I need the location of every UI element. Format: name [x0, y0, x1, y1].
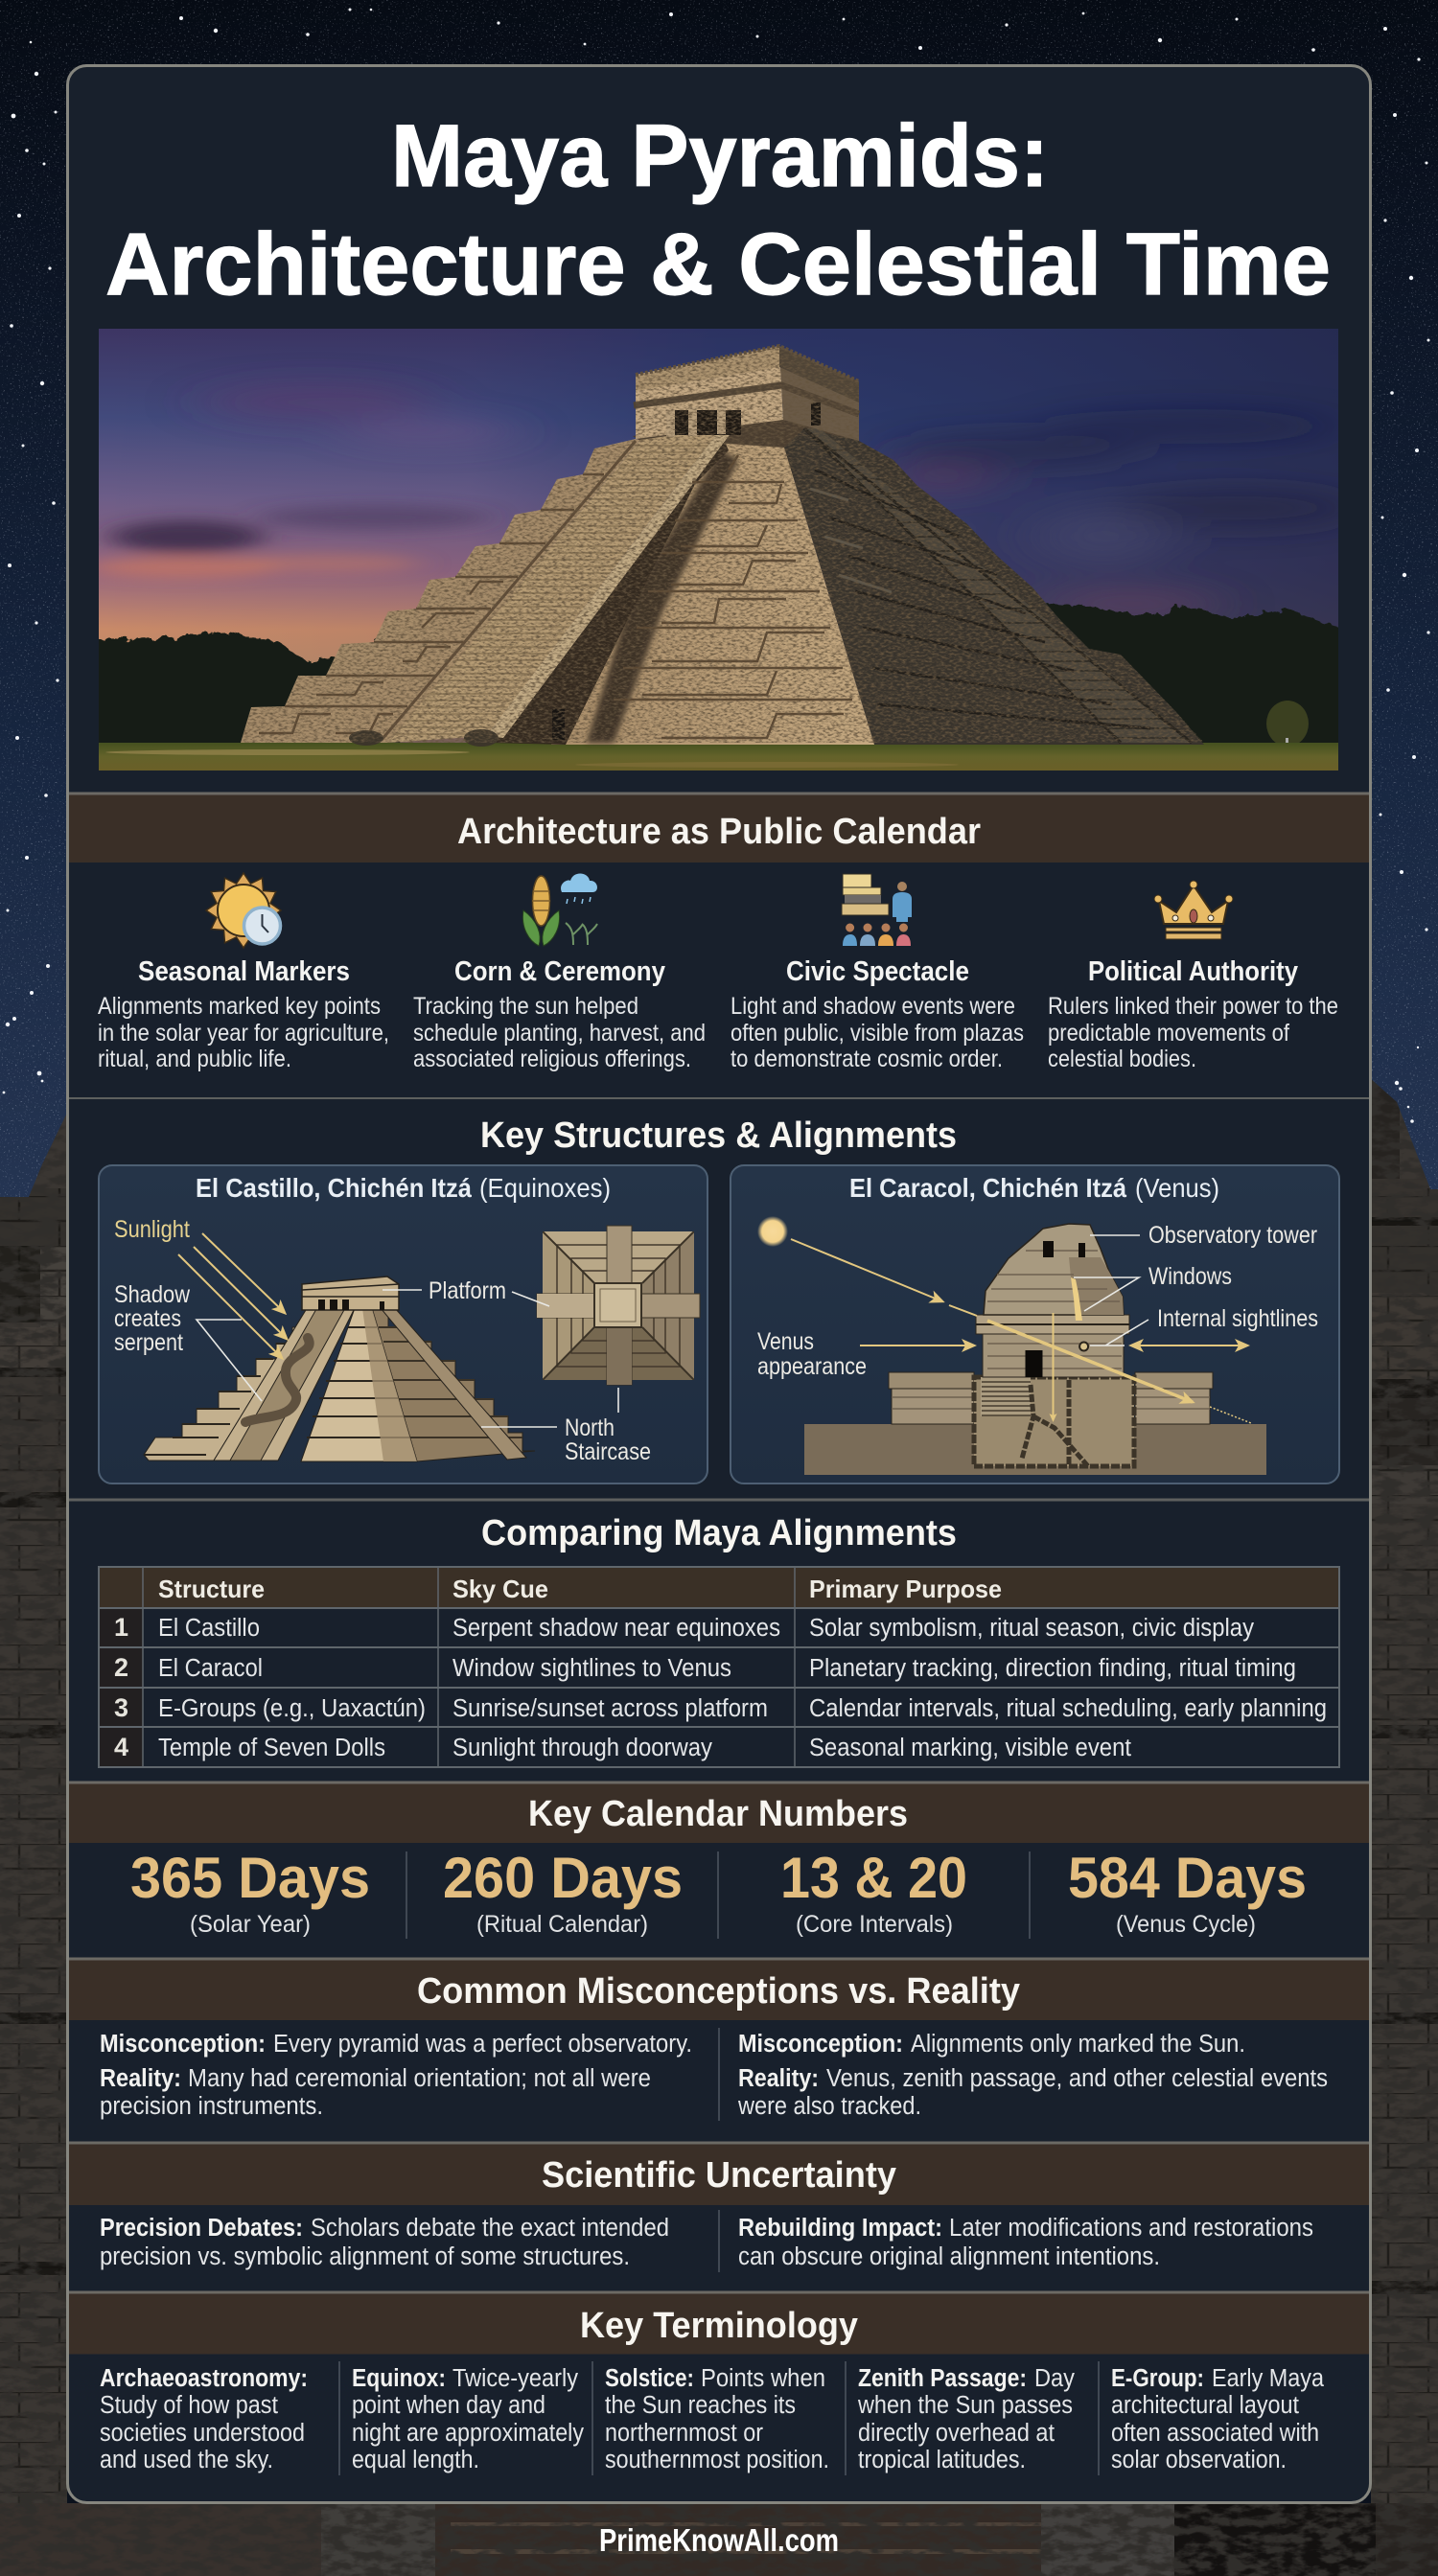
heading: Key Structures & Alignments	[480, 1116, 957, 1156]
table header: Sky Cue	[452, 1575, 548, 1603]
panel: El Castillo diagram	[99, 1165, 707, 1484]
Venus	[757, 1216, 788, 1247]
column: right misconception: Alignments only marked the Sun.	[911, 2031, 1245, 2058]
label: Venus appearance	[757, 1328, 867, 1380]
background: starry sky	[0, 0, 1438, 1246]
hero: temple	[636, 346, 783, 439]
callout lines	[197, 1290, 618, 1427]
column: Rebuilding Impact: Rebuilding Impact:	[738, 2215, 942, 2242]
term: Equinox: point when day and	[352, 2392, 545, 2419]
column: Precision Debates	[100, 2215, 669, 2270]
section: Scientific Uncertainty	[69, 2143, 1369, 2272]
table header	[158, 1575, 1002, 1603]
card: Corn & Ceremony	[413, 956, 706, 1072]
icon: corn and rain	[522, 873, 597, 946]
term: E-Group: architectural layout	[1111, 2392, 1299, 2419]
stat: 13 & 20	[780, 1846, 967, 1938]
hero: stair tread lines	[393, 445, 708, 735]
term: Zenith Passage: Day	[1034, 2365, 1075, 2392]
card: Political Authority: Rulers linked their power to the	[1048, 993, 1338, 1020]
term: Solstice: Points when	[701, 2365, 825, 2392]
term: Archaeoastronomy: and used the sky.	[100, 2447, 273, 2473]
column: Rebuilding Impact: can obscure original alignment intentions.	[738, 2243, 1160, 2270]
heading: Key Terminology	[580, 2306, 858, 2346]
card: Civic Spectacle: to demonstrate cosmic order.	[731, 1046, 1003, 1072]
hero: pyramid	[241, 346, 1204, 747]
label: Venus appearance: Venus	[757, 1328, 814, 1355]
icon: crown	[1154, 881, 1233, 939]
card: Corn & Ceremony: schedule planting, harvest, and	[413, 1020, 706, 1046]
row 3	[114, 1693, 1327, 1722]
term: Solstice: southernmost position.	[605, 2447, 829, 2473]
row 4	[114, 1733, 1131, 1761]
panel title: (Venus)	[1135, 1173, 1219, 1203]
Venus sightline arrows	[791, 1239, 1251, 1423]
row 4: 4	[114, 1733, 128, 1761]
term: E-Group: E-Group:	[1111, 2365, 1204, 2392]
label: Venus appearance: appearance	[757, 1353, 867, 1380]
row 2: El Caracol	[158, 1655, 263, 1682]
label: Sunlight: Sunlight	[114, 1216, 190, 1243]
stat: 365 Days: 365 Days	[130, 1846, 370, 1910]
term: E-Group: solar observation.	[1111, 2447, 1287, 2473]
table header: Primary Purpose	[809, 1575, 1002, 1603]
heading: Scientific Uncertainty	[542, 2155, 896, 2196]
row 4: Seasonal marking, visible event	[809, 1735, 1131, 1761]
term: E-Group: often associated with	[1111, 2420, 1319, 2447]
term: Archaeoastronomy: Archaeoastronomy:	[100, 2365, 308, 2392]
card: Seasonal Markers: Seasonal Markers	[138, 956, 350, 987]
row 1: El Castillo	[158, 1615, 260, 1642]
card: Civic Spectacle: Civic Spectacle	[786, 956, 969, 987]
card: Civic Spectacle: Light and shadow events were	[731, 993, 1015, 1020]
stat: 365 Days: (Solar Year)	[190, 1911, 311, 1938]
row 2: Window sightlines to Venus	[452, 1655, 731, 1682]
column: right misconception: Misconception:	[738, 2031, 903, 2058]
column: Rebuilding Impact: Later modifications and restorations	[949, 2215, 1313, 2242]
card: Seasonal Markers: Alignments marked key points	[98, 993, 381, 1020]
heading: Common Misconceptions vs. Reality	[417, 1971, 1020, 2012]
term: Zenith Passage: tropical latitudes.	[858, 2447, 1026, 2473]
section: Architecture as Public Calendar	[69, 794, 1369, 1072]
term: Archaeoastronomy: societies understood	[100, 2420, 305, 2447]
stat: 584 Days: 584 Days	[1068, 1846, 1307, 1910]
column: Precision Debates: Precision Debates:	[100, 2215, 303, 2242]
term: Equinox: night are approximately	[352, 2420, 584, 2447]
section header bar	[69, 1959, 1369, 2020]
panel title: El Castillo, Chichén Itzá	[196, 1173, 472, 1203]
label: Shadow creates serpent	[114, 1281, 191, 1356]
term: Archaeoastronomy	[100, 2365, 308, 2473]
column: left misconception	[100, 2031, 692, 2120]
column: Rebuilding Impact	[738, 2215, 1313, 2270]
label: Observatory tower: Observatory tower	[1148, 1222, 1317, 1249]
observatory illustration	[804, 1224, 1266, 1475]
row 1: 1	[114, 1613, 128, 1642]
footer: site name: PrimeKnowAll.com	[599, 2522, 839, 2558]
row 2	[114, 1653, 1296, 1682]
row 3: Calendar intervals, ritual scheduling, early planning	[809, 1695, 1327, 1722]
term: Solstice: northernmost or	[605, 2420, 763, 2447]
term: Equinox	[352, 2365, 584, 2473]
card: Civic Spectacle	[731, 956, 1024, 1072]
top-view plan of pyramid	[537, 1226, 700, 1385]
label: Shadow creates serpent: serpent	[114, 1329, 183, 1356]
column: right misconception: Venus, zenith passage, and other celestial events	[826, 2065, 1328, 2092]
label: North Staircase	[565, 1414, 651, 1465]
card: Seasonal Markers	[98, 956, 389, 1072]
heading: Comparing Maya Alignments	[481, 1513, 957, 1553]
table header: Structure	[158, 1575, 265, 1603]
column: right misconception: Reality:	[738, 2065, 819, 2092]
callout lines	[1074, 1235, 1148, 1346]
section: Common Misconceptions vs. Reality	[69, 1959, 1369, 2121]
stat: 260 Days	[443, 1846, 683, 1938]
row 3: E-Groups (e.g., Uaxactún)	[158, 1695, 426, 1722]
section header bar	[69, 794, 1369, 862]
term: E-Group: Early Maya	[1212, 2365, 1325, 2392]
icon: sun and clock	[206, 873, 281, 948]
card: Political Authority: celestial bodies.	[1048, 1046, 1196, 1072]
term: Zenith Passage	[857, 2365, 1075, 2473]
label: Windows: Windows	[1148, 1263, 1232, 1290]
row 2: 2	[114, 1653, 128, 1682]
column: left misconception: Every pyramid was a perfect observatory.	[273, 2031, 692, 2058]
column: right misconception: were also tracked.	[737, 2093, 921, 2120]
hero: ground	[99, 743, 1338, 770]
card: Seasonal Markers: ritual, and public life.	[98, 1046, 291, 1072]
section: Comparing Maya Alignments	[69, 1500, 1369, 1767]
column: left misconception: Many had ceremonial orientation; not all were	[188, 2065, 651, 2092]
heading: Key Calendar Numbers	[528, 1794, 908, 1834]
stat: 13 & 20: (Core Intervals)	[796, 1911, 953, 1938]
stat: 584 Days	[1068, 1846, 1307, 1938]
section header bar	[69, 2292, 1369, 2354]
term: Solstice: the Sun reaches its	[605, 2392, 796, 2419]
hero: trees	[99, 603, 1338, 743]
row 1: Solar symbolism, ritual season, civic display	[809, 1615, 1254, 1642]
section header bar	[69, 2143, 1369, 2205]
hero: terrace lines	[259, 455, 852, 738]
stat: 13 & 20: 13 & 20	[780, 1846, 967, 1910]
title: Maya Pyramids:	[391, 107, 1049, 205]
panel title: (Equinoxes)	[479, 1173, 611, 1203]
card: Political Authority: Political Authority	[1088, 956, 1298, 987]
section: Key Terminology	[69, 2292, 1369, 2475]
label: Internal sightlines: Internal sightlines	[1157, 1305, 1318, 1332]
column: left misconception: precision instruments.	[100, 2093, 323, 2120]
row 4: Sunlight through doorway	[452, 1735, 712, 1761]
column: left misconception: Reality:	[100, 2065, 181, 2092]
panel title: El Caracol, Chichén Itzá	[849, 1173, 1126, 1203]
term: Zenith Passage: Zenith Passage:	[858, 2365, 1027, 2392]
term: Equinox: equal length.	[352, 2447, 479, 2473]
section header bar	[69, 1782, 1369, 1843]
sunlight arrows	[178, 1233, 287, 1358]
term: Archaeoastronomy: Study of how past	[100, 2392, 278, 2419]
card: Political Authority: predictable movements of	[1048, 1020, 1289, 1046]
pyramid illustration	[144, 1276, 535, 1461]
hero image: El Castillo at dusk	[86, 329, 1361, 770]
term: Zenith Passage: when the Sun passes	[857, 2392, 1073, 2419]
comparison table	[99, 1567, 1339, 1767]
term: Equinox: Twice-yearly	[452, 2365, 578, 2392]
stat: 365 Days	[130, 1846, 370, 1938]
icon: civic crowd and temple	[842, 874, 912, 946]
column: right misconception	[737, 2031, 1328, 2120]
label: North Staircase: Staircase	[565, 1438, 651, 1465]
row 1	[114, 1613, 1254, 1642]
heading: Architecture as Public Calendar	[457, 812, 981, 852]
section: Key Calendar Numbers	[69, 1782, 1369, 1939]
card: Civic Spectacle: often public, visible from plazas	[731, 1020, 1024, 1046]
card: Corn & Ceremony: Corn & Ceremony	[454, 956, 665, 987]
stat: 584 Days: (Venus Cycle)	[1116, 1911, 1256, 1938]
background: stone pyramid wall	[0, 1073, 1438, 2576]
section: Key Structures & Alignments	[69, 1098, 1369, 1484]
term: Solstice: Solstice:	[605, 2365, 694, 2392]
term: E-Group	[1111, 2365, 1325, 2473]
term: Solstice	[605, 2365, 829, 2473]
card: Political Authority	[1048, 956, 1338, 1072]
title	[105, 107, 1331, 313]
stat: 260 Days: (Ritual Calendar)	[476, 1911, 648, 1938]
label: Platform: Platform	[429, 1277, 506, 1304]
row 2: Planetary tracking, direction finding, ritual timing	[809, 1655, 1296, 1682]
hero: serpent heads and doorway	[349, 730, 383, 746]
panel: El Caracol diagram	[731, 1165, 1339, 1484]
row 1: Serpent shadow near equinoxes	[452, 1615, 780, 1642]
label: Shadow creates serpent: creates	[114, 1305, 181, 1332]
card: Corn & Ceremony: Tracking the sun helped	[413, 993, 638, 1020]
column: Precision Debates: Scholars debate the exact intended	[311, 2215, 669, 2242]
row 3: Sunrise/sunset across platform	[452, 1695, 768, 1722]
stat: 260 Days: 260 Days	[443, 1846, 683, 1910]
term: Zenith Passage: directly overhead at	[858, 2420, 1055, 2447]
row 3: 3	[114, 1693, 128, 1722]
label: Shadow creates serpent: Shadow	[114, 1281, 191, 1308]
title: Architecture & Celestial Time	[105, 216, 1331, 313]
card: Corn & Ceremony: associated religious offerings.	[413, 1046, 691, 1072]
card: Seasonal Markers: in the solar year for agriculture,	[98, 1020, 389, 1046]
row 4: Temple of Seven Dolls	[158, 1735, 385, 1761]
term: Equinox: Equinox:	[352, 2365, 446, 2392]
label: North Staircase: North	[565, 1414, 615, 1441]
column: left misconception: Misconception:	[100, 2031, 266, 2058]
column: Precision Debates: precision vs. symbolic alignment of some structures.	[100, 2243, 630, 2270]
